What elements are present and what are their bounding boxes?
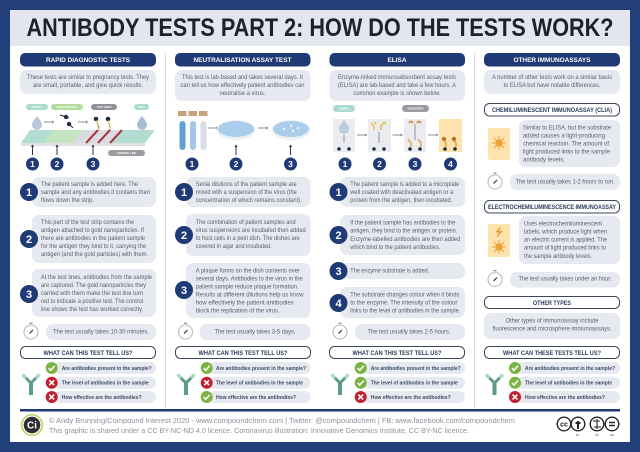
- step 2: 2: [26, 234, 32, 246]
- step 3: [175, 263, 310, 318]
- what can this test tell us: The level of antibodies in the sample: [216, 381, 303, 387]
- step 3: line shows the test has worked correctly.: [41, 307, 143, 313]
- diagram: microplate wells: 2: [377, 159, 382, 169]
- step 3: block the replication of the virus.: [196, 308, 280, 314]
- step 4: to the enzyme. The intensity of the colour: [350, 300, 457, 306]
- icon: creative commons licence: [557, 417, 619, 437]
- diagram: microplate wells: SUBSTRATE: [408, 106, 424, 110]
- step 1: Serial dilutions of the patient sample are: [196, 182, 297, 188]
- step 1: concentration of which remains constant).: [196, 198, 302, 204]
- step 2: to host cells in a petri dish. The dishes are: [196, 236, 300, 242]
- intro text: can tell us how effectively patient antibodies can: [180, 83, 304, 89]
- heading: ELISA: [330, 53, 465, 66]
- step 2: [330, 215, 465, 255]
- test duration: [178, 322, 310, 340]
- icon: creative commons licence: cc: [560, 422, 568, 428]
- other types description: fluorescence and microsphere immunoassays.: [492, 326, 612, 332]
- subheading: CLIA: CHEMILUMINESCENT IMMUNOASSAY (CLIA): [492, 108, 612, 114]
- diagram: microplate wells: SAMPLE: [339, 106, 350, 110]
- CLIA description: [519, 120, 620, 167]
- step 2: antigen attached to gold nanoparticles. If: [41, 228, 144, 234]
- step 1: 1: [26, 187, 32, 199]
- step 1: [330, 177, 465, 207]
- diagram: test strip: 3: [91, 159, 96, 169]
- step 2: This part of the test strip contains the: [41, 220, 135, 226]
- CLIA description: antibody levels.: [523, 157, 565, 163]
- step 4: [330, 287, 465, 318]
- step 3: 3: [335, 266, 342, 278]
- subheading: other types: OTHER TYPES: [533, 301, 571, 307]
- step 1: sample and any antibodies it contains then: [41, 190, 150, 196]
- diagram: tubes and dishes: 3: [288, 159, 293, 169]
- step 2: Enzyme-labelled antibodies are then added: [350, 237, 460, 243]
- diagram: test strip: TEST LINES: [96, 105, 112, 109]
- step 2: The combination of patient samples and: [196, 220, 296, 226]
- step 1: 1: [181, 187, 187, 199]
- panel: neutralisation assay test: [175, 53, 310, 403]
- step 3: how effectively the patient antibodies: [196, 300, 294, 306]
- step 1: well coated with deactivated antigen or a: [349, 190, 454, 196]
- electrochemiluminescence description: [519, 216, 620, 264]
- heading: neutralisation assay test: [175, 53, 310, 66]
- step 3: A plaque forms on the dish contents over: [196, 268, 300, 274]
- panel: rapid diagnostic tests: [20, 53, 156, 403]
- CLIA description: chemical reaction. The amount of: [523, 141, 609, 147]
- what can these tests tell us: Are antibodies present in the sample?: [525, 366, 616, 372]
- what can these tests tell us: WHAT CAN THESE TESTS TELL US?: [503, 351, 601, 357]
- credits text: [49, 416, 515, 435]
- step 3: [330, 262, 465, 280]
- intro text: [484, 70, 620, 94]
- step 1: [175, 177, 310, 207]
- diagram: test strip: SAMPLE: [32, 105, 43, 109]
- CLIA duration: The test usually takes 1-2 hours to run.: [516, 180, 615, 186]
- step 1: protein from the antigen, then incubated.: [350, 198, 453, 204]
- CLIA description: added causes a light-producing: [523, 133, 605, 139]
- heading: ELISA: ELISA: [388, 57, 407, 64]
- step 2: antigen (and the gold particles) with them.: [41, 252, 148, 258]
- panel: other immunoassays: [484, 53, 620, 403]
- electrochemiluminescence description: amount of light produced links to: [524, 245, 607, 251]
- intro text: are small, portable, and give quick results.: [33, 83, 143, 89]
- what can these tests tell us: How effective are the antibodies?: [525, 395, 606, 401]
- heading: neutralisation assay test: NEUTRALISATION ASSAY TEST: [194, 57, 292, 64]
- diagram: microplate wells: 1: [343, 159, 348, 169]
- footer: [20, 409, 620, 437]
- heading: other immunoassays: [484, 53, 620, 66]
- intro text: common example is shown below.: [354, 91, 441, 97]
- step 2: virus suspensions are incubated then added: [196, 228, 306, 234]
- diagram: tubes and dishes: [178, 111, 310, 170]
- step 1: The patient sample is added here. The: [41, 182, 139, 188]
- step 2: which bind to the patient antibodies.: [349, 245, 441, 251]
- electrochemiluminescence description: Uses electrochemiluminescent: [524, 221, 602, 227]
- panel: ELISA: [330, 53, 465, 403]
- step 2: [175, 214, 310, 256]
- diagram: test strip: WICK: [138, 105, 145, 109]
- step 3: 3: [26, 289, 32, 301]
- what can these tests tell us: The level of antibodies in the sample: [525, 381, 612, 387]
- electrochemiluminescence description: an electric current is applied. The: [524, 237, 608, 243]
- step 3: are captured. The gold nanoparticles they: [41, 283, 146, 289]
- electrochemiluminescence description: the sample antibody levels.: [524, 254, 592, 260]
- step 1: 1: [335, 187, 342, 199]
- what can this test tell us: How effective are the antibodies?: [216, 395, 297, 401]
- subheading: other types: [484, 296, 620, 308]
- diagram: microplate wells: 4: [448, 159, 453, 169]
- step 1: mixed with a suspension of the virus (the: [196, 190, 297, 196]
- what can this test tell us: [20, 346, 156, 403]
- step 3: [20, 269, 156, 317]
- what can this test tell us: The level of antibodies in the sample: [62, 381, 149, 387]
- CLIA duration: [488, 172, 620, 190]
- step 2: 2: [181, 230, 187, 242]
- what can this test tell us: Are antibodies present in the sample?: [371, 366, 461, 372]
- intro text: [20, 70, 156, 94]
- icon: creative commons licence: BY: [576, 433, 580, 437]
- electrochemiluminescence duration: [488, 270, 620, 288]
- step 1: [20, 177, 156, 207]
- CLIA description: Similar to ELISA, but the substrate: [523, 125, 612, 131]
- other types description: Other types of immunoassay include: [506, 318, 599, 324]
- what can this test tell us: Are antibodies present in the sample?: [62, 366, 152, 372]
- what can this test tell us: Are antibodies present in the sample?: [216, 366, 307, 372]
- icon: creative commons licence: ND: [610, 433, 615, 437]
- intro text: A number of other tests work on a similar basis: [492, 75, 612, 81]
- diagram: test strip: 2: [55, 159, 60, 169]
- step 3: 3: [181, 285, 187, 297]
- electrochemiluminescence description: labels, which produce light when: [524, 229, 607, 235]
- step 4: The substrate changes colour when it binds: [350, 292, 459, 298]
- diagram: microplate wells: 3: [413, 159, 418, 169]
- credits text: This graphic is shared under a CC BY-NC-ND 4.0 licence. Coronavirus illustration: Innovative Genomics Institute, CC BY-NC licence.: [49, 426, 469, 435]
- step 4: links to the level of antibodies in the sample.: [350, 308, 461, 314]
- diagram: test strip: GOLD ANTIGEN: [57, 105, 77, 109]
- step 1: The patient sample is added to a microplate: [350, 182, 460, 188]
- subheading: electrochemiluminescence: ELECTROCHEMILUMINESCENCE IMMUNOASSAY: [488, 205, 616, 211]
- credits text: © Andy Brunning/Compound Interest 2020 - www.compoundchem.com | Twitter: @compoundchem | FB: www.facebook.com/compoundchem: [49, 416, 515, 425]
- step 3: several days. Antibodies to the virus in the: [196, 276, 303, 282]
- diagram: tubes and dishes: 2: [234, 159, 239, 169]
- intro text: This test is lab-based and takes several days. It: [182, 75, 303, 81]
- icon: electric bolt and light: [488, 224, 510, 257]
- diagram: test strip: CONTROL LINE: [117, 151, 136, 155]
- step 1: flows down the strip.: [41, 198, 94, 204]
- what can this test tell us: How effective are the antibodies?: [62, 395, 142, 401]
- what can this test tell us: WHAT CAN THIS TEST TELL US?: [44, 351, 133, 357]
- step 4: 4: [335, 298, 342, 310]
- icon: light in yellow well: [488, 128, 510, 160]
- diagram: test strip: 1: [30, 159, 35, 169]
- intro text: [175, 70, 310, 101]
- test duration: [333, 322, 465, 340]
- CLIA description: light produced links to the sample: [523, 149, 611, 155]
- what can these tests tell us: [484, 346, 620, 403]
- intro text: (ELISA) are lab-based and take a few hours. A: [338, 83, 456, 89]
- intro text: neutralise a virus.: [220, 91, 266, 97]
- what can this test tell us: The level of antibodies in the sample: [371, 381, 458, 387]
- what can this test tell us: How effective are the antibodies?: [371, 395, 451, 401]
- diagram: test strip: [21, 104, 155, 170]
- what can this test tell us: [330, 346, 465, 403]
- step 2: 2: [335, 230, 342, 242]
- test duration: [24, 322, 156, 340]
- diagram: tubes and dishes: 1: [190, 159, 195, 169]
- step 3: The enzyme substrate is added.: [350, 268, 430, 274]
- diagram: microplate wells: [333, 105, 462, 170]
- test duration: The test usually takes 2-5 hours.: [368, 329, 451, 335]
- heading: other immunoassays: OTHER IMMUNOASSAYS: [514, 57, 591, 64]
- step 2: If the patient sample has antibodies to the: [350, 220, 456, 226]
- logo: compound interest: Ci: [27, 420, 37, 432]
- intro text: Enzyme-linked immunoabsorbent assay tests: [338, 75, 456, 81]
- other types description: [484, 313, 620, 339]
- heading: rapid diagnostic tests: [20, 53, 156, 66]
- intro text: [330, 70, 465, 101]
- logo: compound interest: [21, 414, 43, 436]
- step 2: antigen, they bind to the antigen or protein.: [350, 229, 458, 235]
- what can this test tell us: WHAT CAN THIS TEST TELL US?: [352, 351, 442, 357]
- subheading: CLIA: [484, 104, 620, 116]
- test duration: The test usually takes 10-30 minutes.: [53, 329, 149, 335]
- icon: creative commons licence: NC: [595, 433, 600, 437]
- subheading: electrochemiluminescence: [484, 200, 620, 213]
- step 3: patient sample reduce plaque formation.: [196, 284, 299, 290]
- electrochemiluminescence duration: The test usually takes under an hour.: [518, 276, 612, 282]
- intro text: to ELISA but have notable differences.: [504, 83, 601, 89]
- intro text: These tests are similar to pregnancy tests. They: [27, 75, 149, 81]
- step 3: red to indicate a positive test. The control: [41, 299, 143, 305]
- step 2: for the antigen they bind to it, carrying the: [41, 244, 147, 250]
- test duration: The test usually takes 3-5 days.: [214, 329, 296, 335]
- heading: rapid diagnostic tests: RAPID DIAGNOSTIC TESTS: [46, 57, 131, 64]
- what can this test tell us: WHAT CAN THIS TEST TELL US?: [198, 351, 288, 357]
- step 2: there are antibodies in the patient sample: [41, 236, 146, 242]
- step 3: At the test lines, antibodies from the sample: [41, 275, 153, 281]
- what can this test tell us: [176, 346, 310, 403]
- step 3: Results at different dilutions help us know: [196, 292, 304, 298]
- step 2: [20, 215, 156, 263]
- step 3: carried with them make the test line turn: [41, 291, 143, 297]
- step 2: covered in agar and incubated.: [196, 244, 272, 250]
